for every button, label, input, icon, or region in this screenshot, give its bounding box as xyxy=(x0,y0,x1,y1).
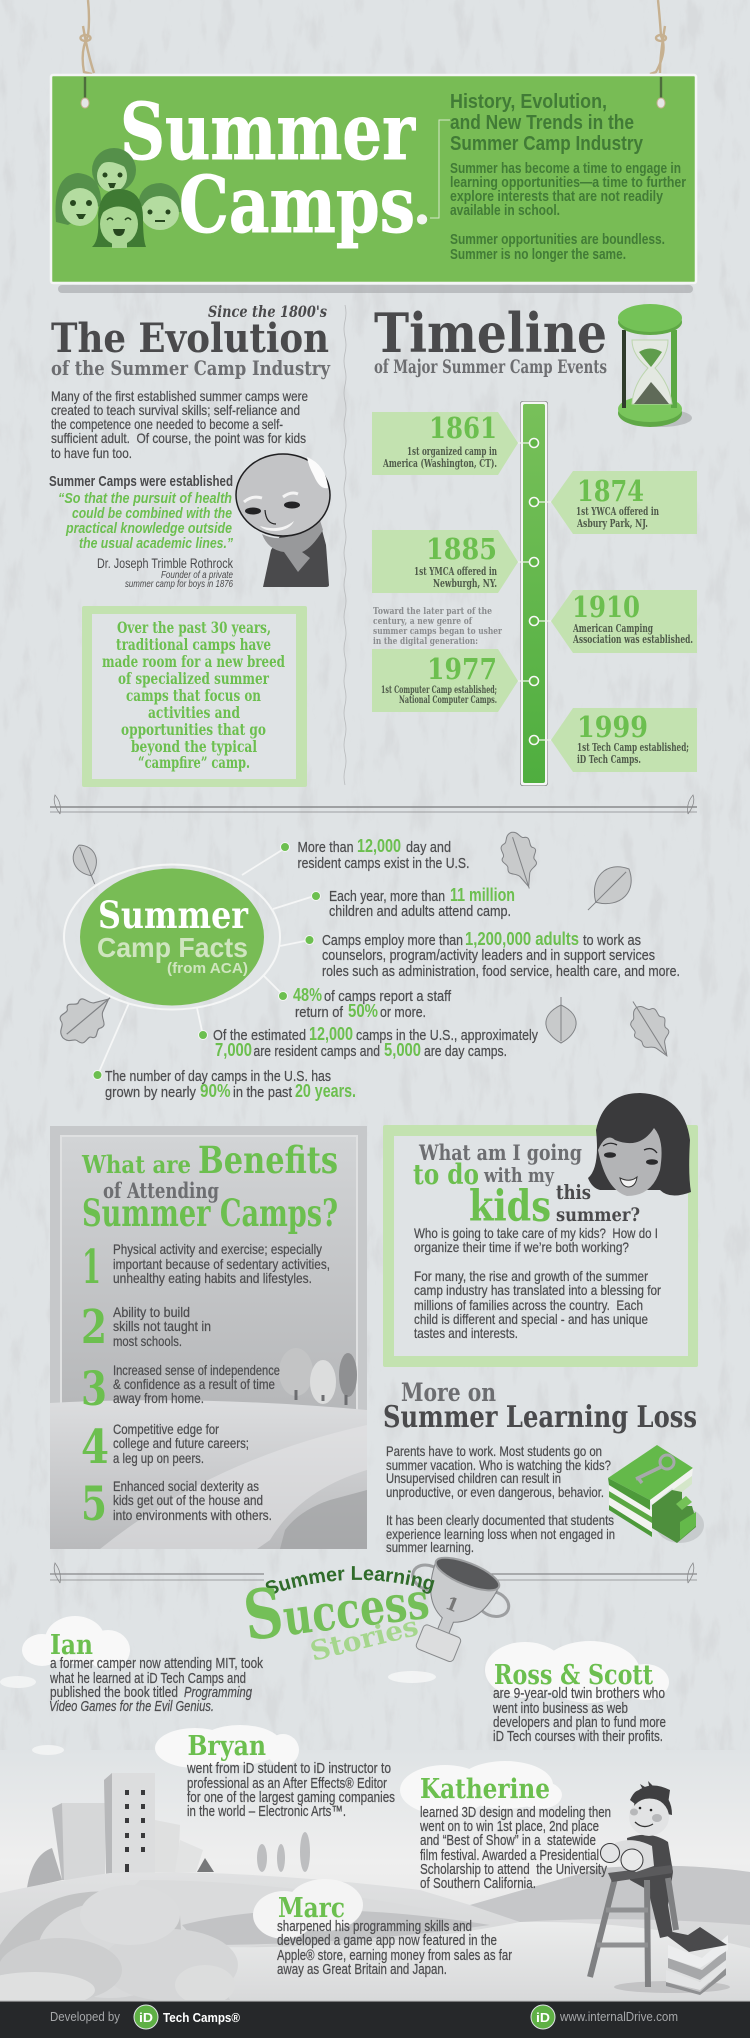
logo: iD Tech Camps: iD xyxy=(139,2010,153,2025)
fact 4: 48% xyxy=(293,985,322,1005)
rope: right xyxy=(650,0,666,74)
event 1885: Newburgh, NY. xyxy=(433,577,497,590)
fact 3: roles such as administration, food service, health care, and more. xyxy=(322,963,680,980)
fact 6: in the past xyxy=(233,1084,293,1101)
story: Bryan: in the world – Electronic Arts™. xyxy=(187,1803,346,1820)
story: Marc: Apple® store, earning money from sales as far xyxy=(277,1947,512,1964)
note: digital generation xyxy=(373,606,503,647)
body text xyxy=(414,1225,661,1341)
logo: iD Tech Camps: Tech Camps® xyxy=(163,2010,240,2025)
benefits heading: What are xyxy=(81,1150,191,1179)
sign bracket connector xyxy=(430,120,450,218)
benefits heading: of Attending xyxy=(103,1178,219,1203)
fact 5: 5,000 xyxy=(384,1040,421,1060)
event 1874: 1874 xyxy=(577,474,644,508)
story: Bryan: went from iD student to iD instructor to xyxy=(186,1760,391,1777)
panel: camp facts xyxy=(49,827,682,1101)
fact 1: day and xyxy=(406,839,451,856)
books xyxy=(666,1927,728,1995)
benefit 1: 1 xyxy=(82,1240,101,1295)
heading: this xyxy=(556,1180,591,1204)
fact 2: children and adults attend camp. xyxy=(329,903,511,920)
panel: summer learning loss xyxy=(383,1378,704,1555)
timeline bar xyxy=(518,401,551,786)
event 1977 xyxy=(372,649,518,712)
story: Ian: Video Games for the Evil Genius. xyxy=(49,1698,214,1715)
event 1885: 1st YMCA offered in xyxy=(414,565,497,578)
event 1861: 1st organized camp in xyxy=(407,445,497,458)
callout: new breed: of specialized summer xyxy=(118,669,270,688)
quote: practical knowledge outside xyxy=(65,520,232,537)
body text: summer vacation. Who is watching the kids? xyxy=(386,1457,611,1473)
logo: internalDrive: www.internalDrive.com xyxy=(559,2009,678,2024)
callout: new breed: camps that focus on xyxy=(126,686,261,705)
heading xyxy=(413,1140,640,1232)
fact 3: counselors, program/activity leaders and in support services xyxy=(322,947,655,964)
story: Katherine: learned 3D design and modeling then xyxy=(420,1804,611,1821)
icon: oak leaf xyxy=(495,827,546,894)
benefit 3: 3 xyxy=(81,1362,107,1417)
subheading: of the Summer Camp Industry xyxy=(51,356,331,380)
event 1861: 1861 xyxy=(429,411,497,445)
sign heading xyxy=(450,91,644,155)
facts circle: Summer xyxy=(98,893,248,937)
body text: Parents have to work. Most students go on xyxy=(386,1443,602,1459)
benefit 4: a leg up on peers. xyxy=(113,1450,204,1466)
benefit 1: Physical activity and exercise; especially xyxy=(113,1241,322,1257)
benefit 4: Competitive edge for xyxy=(113,1421,219,1437)
event 1977: National Computer Camps. xyxy=(399,695,497,706)
sign body text: explore interests that are not readily xyxy=(450,189,663,205)
intro paragraph: the competence one needed to become a self- xyxy=(51,416,283,432)
benefit 5 xyxy=(81,1477,272,1532)
fact 5: 12,000 xyxy=(309,1024,353,1044)
heading: summer? xyxy=(556,1204,640,1226)
benefit 3: Increased sense of independence xyxy=(113,1362,280,1378)
quote: Founder of a private xyxy=(161,570,233,581)
event 1999: 1st Tech Camp established; xyxy=(577,741,689,754)
benefit 5: kids get out of the house and xyxy=(113,1492,263,1508)
event 1999: iD Tech Camps. xyxy=(577,753,641,766)
body text: Who is going to take care of my kids? How do I xyxy=(414,1225,658,1241)
event 1999 xyxy=(551,708,697,772)
sign body text: Summer opportunities are boundless. xyxy=(450,232,665,248)
panel: timeline xyxy=(372,301,697,786)
story: Katherine xyxy=(400,1761,611,1892)
heading: kids xyxy=(469,1182,551,1232)
story: Katherine: went on to win 1st place, 2nd place xyxy=(419,1818,599,1835)
story: Ross & Scott: Ross & Scott xyxy=(494,1660,653,1691)
event 1885 xyxy=(372,530,518,593)
benefit 5: Enhanced social dexterity as xyxy=(113,1478,259,1494)
benefits heading: Summer Camps? xyxy=(82,1191,338,1235)
story: Ian: published the book titled xyxy=(50,1684,178,1701)
fact 4: of camps report a staff xyxy=(324,988,452,1005)
story: Marc: developed a game app now featured in the xyxy=(277,1932,497,1949)
fact 1: resident camps exist in the U.S. xyxy=(298,855,470,872)
benefit 5: into environments with others. xyxy=(113,1507,272,1523)
fact 1: 12,000 xyxy=(357,836,401,856)
event 1910: American Camping xyxy=(572,622,653,635)
fact 3: Camps employ more than xyxy=(322,932,463,949)
story: Bryan: Bryan xyxy=(188,1731,266,1762)
event 1861: America (Washington, CT). xyxy=(382,457,497,470)
quote xyxy=(49,473,233,590)
benefit 1: important because of sedentary activities, xyxy=(113,1256,330,1272)
icon: hourglass xyxy=(618,304,692,427)
vertical divider xyxy=(344,305,346,785)
heading: More on xyxy=(401,1378,496,1407)
icon: oak leaf xyxy=(49,981,123,1053)
panel: success stories title xyxy=(239,1555,510,1668)
connector lines xyxy=(99,850,311,1072)
fact 3: to work as xyxy=(583,932,641,949)
benefit 1 xyxy=(82,1240,330,1295)
cloud xyxy=(400,1761,562,1815)
fact 1: More than xyxy=(298,839,354,856)
fact 3 xyxy=(305,929,680,980)
story: Katherine: Scholarship to attend the University xyxy=(420,1861,607,1878)
body text: organize their time if we’re both working? xyxy=(414,1239,629,1255)
sign heading: and New Trends in the xyxy=(450,112,634,134)
bushes xyxy=(0,1885,238,2008)
fact 2 xyxy=(312,885,515,920)
fact 4: return of xyxy=(295,1004,344,1021)
icon: leaf xyxy=(69,841,105,888)
story: Ian: Programming xyxy=(184,1684,252,1701)
sign body text: learning opportunities—a time to further xyxy=(450,175,686,191)
benefit 3: away from home. xyxy=(113,1390,204,1406)
cloud xyxy=(485,1641,669,1703)
section divider xyxy=(50,795,697,814)
sign title: Summer xyxy=(120,87,416,178)
callout: new breed xyxy=(82,606,307,787)
callout: new breed: made room for a new breed xyxy=(102,652,285,671)
event 1999: 1999 xyxy=(577,710,648,744)
sign body text: Summer has become a time to engage in xyxy=(450,161,681,177)
sign title: Camps xyxy=(179,160,415,251)
story: Katherine: and “Best of Show” in a statewide xyxy=(420,1832,596,1849)
event 1861 xyxy=(372,411,518,475)
story: Marc: sharpened his programming skills and xyxy=(277,1918,472,1935)
subheading: of Major Summer Camp Events xyxy=(374,356,607,378)
credit: developed by: Developed by xyxy=(50,2009,120,2024)
benefit 4: 4 xyxy=(81,1420,109,1475)
heading: What am I going xyxy=(418,1140,582,1165)
panel: evolution xyxy=(49,302,331,787)
section divider with title gap xyxy=(50,1563,697,1583)
heading: timeline: Timeline xyxy=(374,301,607,365)
benefits heading: Benefits xyxy=(198,1138,338,1182)
benefit 2: 2 xyxy=(81,1300,107,1355)
body text: camp industry has translated into a blessing for xyxy=(414,1282,661,1298)
callout: new breed: activities and xyxy=(148,703,240,722)
event 1977: 1977 xyxy=(427,652,497,686)
intro paragraph: to have fun too. xyxy=(51,445,132,461)
story: Ian xyxy=(22,1616,263,1715)
quote: Summer Camps were established xyxy=(49,473,233,490)
callout: new breed: Over the past 30 years, xyxy=(117,618,271,637)
title: stories: Stories xyxy=(307,1611,421,1668)
rope: left xyxy=(80,0,94,74)
scene: hill and trees xyxy=(50,1348,367,1549)
story: Bryan: for one of the largest gaming companies xyxy=(187,1789,395,1806)
callout: new breed: traditional camps have xyxy=(116,635,271,654)
story: Ross & Scott xyxy=(485,1641,669,1745)
note: digital generation: century, a new genre of xyxy=(373,616,473,627)
fact 1 xyxy=(280,836,470,872)
story: Ross & Scott: developers and plan to fund more xyxy=(493,1714,666,1731)
facts circle: Camp Facts xyxy=(97,932,248,963)
story: Katherine: film festival. Awarded a Presidential xyxy=(420,1847,599,1864)
body text: Unsupervised children can result in xyxy=(386,1470,561,1486)
logo: internalDrive xyxy=(531,2005,678,2029)
event 1910: Association was established. xyxy=(572,633,693,646)
quote: Dr. Joseph Trimble Rothrock xyxy=(97,556,233,571)
callout: new breed: opportunities that go xyxy=(121,720,266,739)
benefit 2 xyxy=(81,1300,211,1355)
event 1874 xyxy=(551,471,697,534)
story: Ian: what he learned at iD Tech Camps and xyxy=(49,1670,246,1687)
distant trees xyxy=(257,1832,310,1872)
heading xyxy=(383,1378,697,1435)
icon: leaf xyxy=(576,857,641,922)
body text: millions of families across the country. Each xyxy=(414,1297,643,1313)
icon: books and key xyxy=(608,1445,704,1543)
cloud xyxy=(155,1725,299,1768)
fact 5: camps in the U.S., approximately xyxy=(356,1027,538,1044)
story: Ian: a former camper now attending MIT, took xyxy=(50,1655,263,1672)
footer xyxy=(0,2000,750,2038)
icon: trophy: 1 xyxy=(442,1593,462,1617)
story: Marc: away as Great Britain and Japan. xyxy=(277,1961,447,1978)
sign body text: available in school. xyxy=(450,203,560,219)
sign title xyxy=(120,87,432,251)
facts circle: (from ACA) xyxy=(167,960,248,977)
intro paragraph xyxy=(51,388,308,461)
fact 2: 11 million xyxy=(450,885,515,905)
intro paragraph: created to teach survival skills; self-reliance and xyxy=(51,402,300,418)
story: Ross & Scott: went into business as web xyxy=(492,1700,628,1717)
event 1910: 1910 xyxy=(572,590,640,624)
fact 4 xyxy=(278,985,452,1021)
fact 6: grown by nearly xyxy=(105,1084,196,1101)
story: Ian: Ian xyxy=(50,1630,93,1661)
event 1910 xyxy=(551,590,697,653)
intro paragraph: Many of the first established summer camps were xyxy=(51,388,308,404)
benefit 3: & confidence as a result of time xyxy=(113,1376,275,1392)
logo: internalDrive: iD xyxy=(536,2010,550,2025)
story: Bryan xyxy=(155,1725,395,1820)
fact 6: 90% xyxy=(200,1081,230,1101)
icon: leaf xyxy=(546,997,576,1043)
fact 4: 50% xyxy=(348,1001,378,1021)
benefit 4: college and future careers; xyxy=(113,1435,249,1451)
callout: new breed: “campfire” camp. xyxy=(138,753,250,772)
icon: old man xyxy=(236,454,330,587)
fact 5: are day camps. xyxy=(424,1043,507,1060)
benefit 1: unhealthy eating habits and lifestyles. xyxy=(113,1270,312,1286)
icon: girl face xyxy=(588,1093,691,1196)
body text: experience learning loss when not engaged in xyxy=(386,1526,615,1542)
hanging sign xyxy=(51,75,696,293)
story: Katherine: of Southern California. xyxy=(420,1875,536,1892)
heading: the evolution: The Evolution xyxy=(51,315,329,362)
fact 6: 20 years. xyxy=(295,1081,356,1101)
body text: unproductive, or even dangerous, behavior. xyxy=(386,1484,604,1500)
illustration: boy on stool with binoculars xyxy=(590,1781,730,1995)
panel: benefits xyxy=(50,1126,367,1549)
icon: oak leaf xyxy=(618,992,682,1065)
title: summer learning: Summer Learning xyxy=(266,1566,434,1594)
small clouds xyxy=(0,1671,436,1755)
story: Marc xyxy=(253,1879,512,1978)
story: Katherine: Katherine xyxy=(420,1774,550,1805)
benefits heading xyxy=(81,1138,338,1235)
quote: summer camp for boys in 1876 xyxy=(125,579,233,590)
fact 5: are resident camps and xyxy=(254,1043,380,1060)
heading: to do xyxy=(413,1158,479,1191)
fact 5 xyxy=(198,1024,538,1060)
facts circle xyxy=(64,864,280,1010)
sign body text xyxy=(450,161,686,263)
body text: summer learning. xyxy=(386,1539,474,1555)
fact 2: Each year, more than xyxy=(329,888,445,905)
benefit 2: Ability to build xyxy=(113,1304,190,1320)
event 1885: 1885 xyxy=(426,532,497,566)
heading: with my xyxy=(483,1163,555,1187)
sign heading: Summer Camp Industry xyxy=(450,133,644,155)
sign heading: History, Evolution, xyxy=(450,91,607,113)
body text: For many, the rise and growth of the summer xyxy=(414,1268,648,1284)
icon: four kids' faces xyxy=(55,148,181,248)
fact 3: 1,200,000 adults xyxy=(465,929,579,949)
note: digital generation: summer camps began to usher xyxy=(373,626,503,637)
fact 5: Of the estimated xyxy=(213,1027,306,1044)
body text: child is different and special - and has unique xyxy=(414,1311,648,1327)
event 1874: 1st YWCA offered in xyxy=(576,505,659,518)
benefit 5: 5 xyxy=(81,1477,107,1532)
quote: “So that the pursuit of health xyxy=(58,490,232,507)
title: success: Success xyxy=(239,1555,433,1657)
story: Ross & Scott: iD Tech courses with their profits. xyxy=(493,1728,663,1745)
city buildings xyxy=(52,1773,214,1880)
fact 4: or more. xyxy=(380,1004,426,1021)
landscape background xyxy=(0,1750,750,2008)
sign body text: Summer is no longer the same. xyxy=(450,247,626,263)
benefit 3 xyxy=(81,1362,280,1417)
note: digital generation: in the digital generation: xyxy=(373,636,478,647)
note: digital generation: Toward the later part of the xyxy=(373,606,492,617)
benefit 2: most schools. xyxy=(113,1333,182,1349)
body text: tastes and interests. xyxy=(414,1325,518,1341)
panel: what to do with kids xyxy=(383,1093,698,1367)
event 1977: 1st Computer Camp established; xyxy=(381,685,497,696)
logo: iD Tech Camps xyxy=(134,2005,240,2029)
story: Ross & Scott: are 9-year-old twin brothers who xyxy=(493,1685,665,1702)
cloud xyxy=(22,1616,130,1670)
fact 6: The number of day camps in the U.S. has xyxy=(105,1068,331,1085)
body text xyxy=(386,1443,615,1555)
fact 6 xyxy=(93,1068,356,1101)
sign title: . xyxy=(412,172,432,236)
event 1874: Asbury Park, NJ. xyxy=(576,517,648,530)
quote: could be combined with the xyxy=(72,505,232,522)
story: Marc: Marc xyxy=(278,1893,345,1924)
body text: It has been clearly documented that students xyxy=(386,1512,614,1528)
heading: since the 1800's: Since the 1800's xyxy=(208,302,327,321)
callout: new breed: beyond the typical xyxy=(131,737,257,756)
story: Bryan: professional as an After Effects® Editor xyxy=(187,1775,387,1792)
fact 5: 7,000 xyxy=(215,1040,252,1060)
quote: the usual academic lines.” xyxy=(79,535,233,552)
icon: trophy xyxy=(387,1545,519,1675)
benefit 4 xyxy=(81,1420,249,1475)
cloud xyxy=(253,1879,363,1939)
benefit 2: skills not taught in xyxy=(113,1318,211,1334)
intro paragraph: sufficient adult. Of course, the point was for kids xyxy=(51,430,306,446)
